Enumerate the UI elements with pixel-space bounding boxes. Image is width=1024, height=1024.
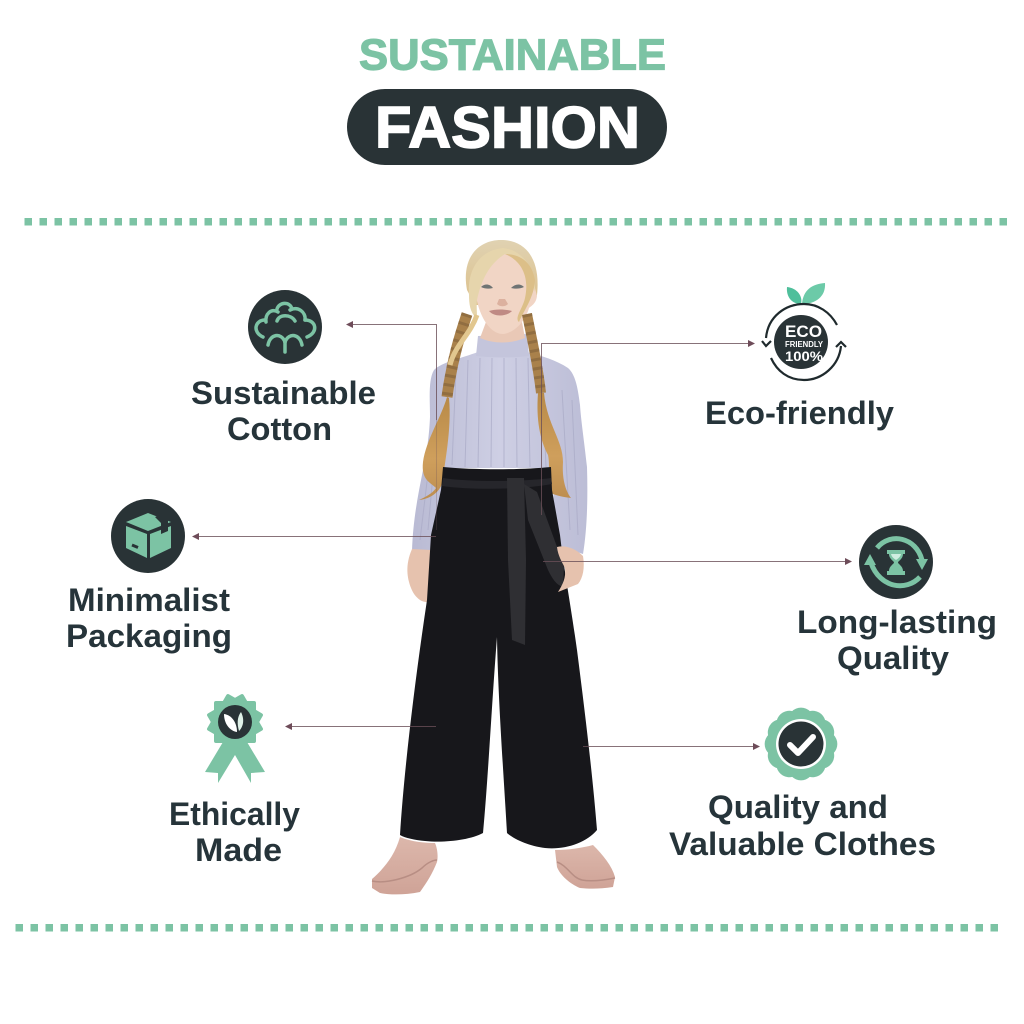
label: minimalist packaging: Packaging [66, 618, 232, 654]
shoe left [372, 837, 438, 894]
icon: rosette [205, 693, 265, 783]
label: quality and valuable clothes [669, 789, 936, 862]
right hand [557, 546, 584, 592]
leader: quality clothes [583, 743, 760, 750]
label: sustainable cotton: Sustainable [191, 375, 376, 411]
label: sustainable cotton: Cotton [227, 411, 332, 447]
leader: long-lasting quality [543, 558, 852, 565]
label: long-lasting quality: Long-lasting [797, 604, 997, 640]
leader: minimalist packaging [192, 533, 436, 540]
label: ethically made: Made [195, 832, 282, 868]
icon: eco friendly: 100% [785, 349, 823, 364]
shoe right [555, 845, 615, 889]
label: long-lasting quality [797, 604, 997, 676]
leader: sustainable cotton [346, 321, 436, 530]
icon: eco friendly [762, 283, 846, 380]
trousers [400, 467, 597, 848]
label: sustainable cotton [191, 375, 376, 447]
braid right [527, 314, 571, 498]
label: ethically made [169, 796, 300, 868]
icon: check badge [759, 702, 843, 786]
title: sustainable: SUSTAINABLE [359, 30, 666, 80]
belt [507, 478, 564, 645]
hair back [466, 240, 538, 305]
sweater [412, 334, 587, 554]
leader: ethically made [285, 723, 436, 730]
face and neck [469, 248, 537, 342]
label: ethically made: Ethically [169, 796, 300, 832]
icon: eco friendly: ECO [785, 322, 822, 341]
left hand [407, 549, 431, 602]
icon: hourglass [859, 525, 933, 599]
label: quality and valuable clothes: Valuable Clothes [669, 826, 936, 862]
icon: box [111, 499, 185, 573]
label: minimalist packaging: Minimalist [68, 582, 230, 618]
title: fashion pill: FASHION [375, 96, 640, 160]
icon: cotton [248, 290, 322, 364]
model photo [372, 240, 615, 894]
braid left [419, 314, 477, 500]
label: quality and valuable clothes: Quality and [708, 789, 888, 825]
title: fashion pill [347, 89, 667, 165]
label: minimalist packaging [66, 582, 232, 654]
leader: eco-friendly [542, 340, 755, 515]
label: long-lasting quality: Quality [837, 640, 949, 676]
icon: eco friendly: FRIENDLY [785, 340, 824, 349]
label: eco-friendly: Eco-friendly [705, 395, 894, 431]
